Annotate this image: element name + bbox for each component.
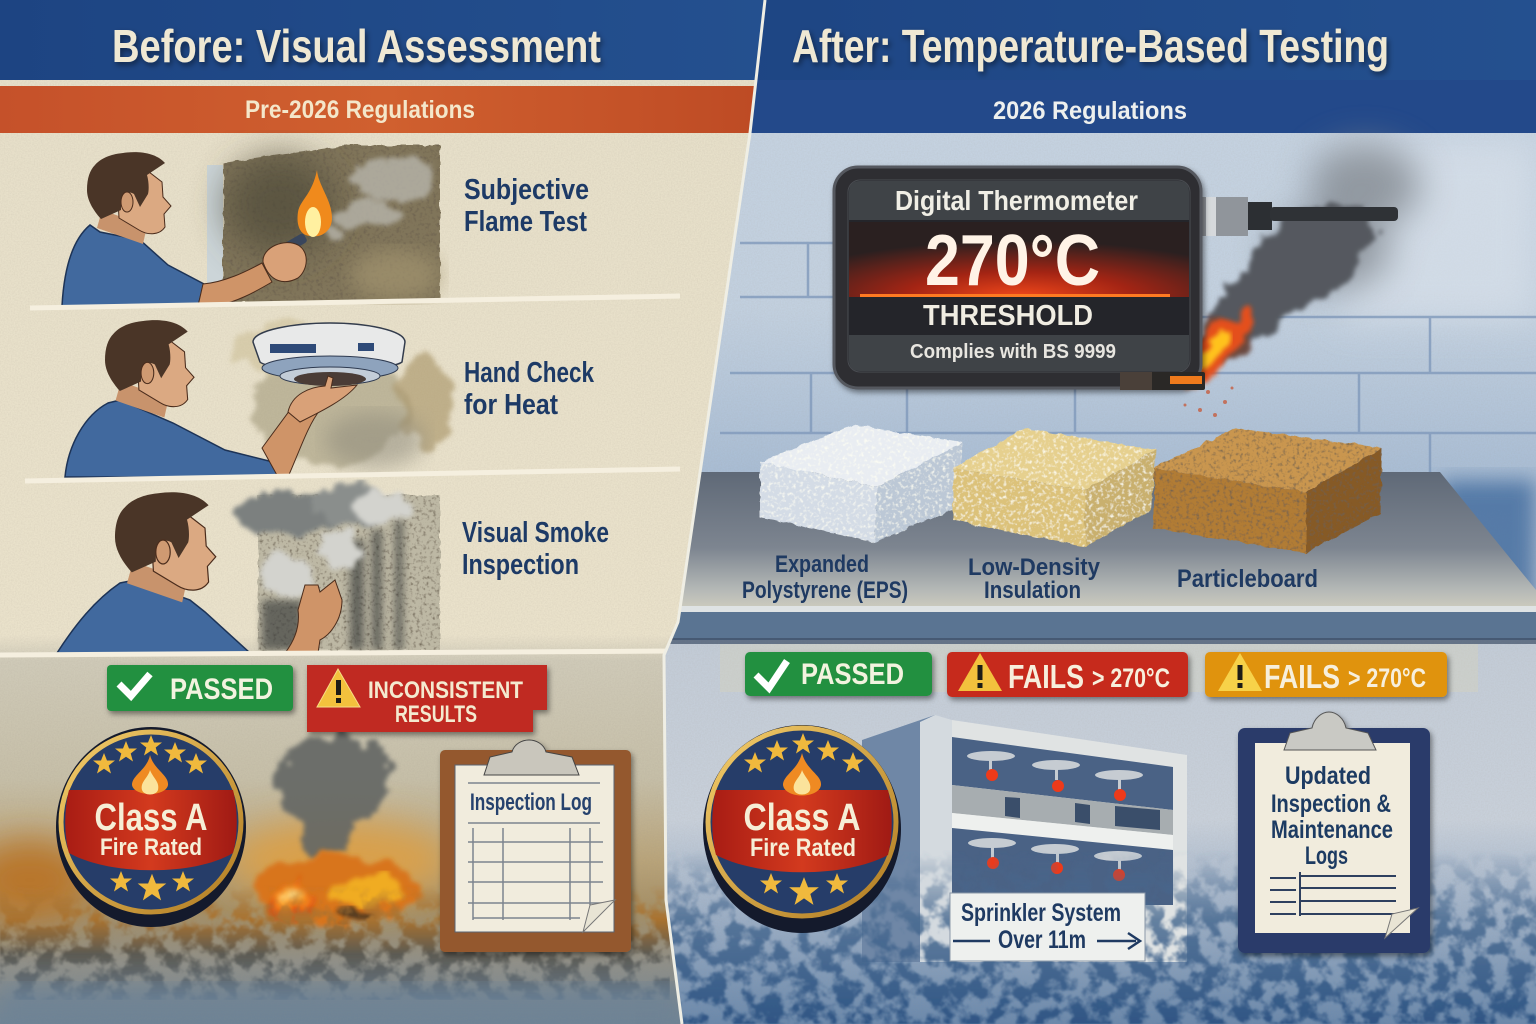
man: shirt and arm — [65, 320, 320, 477]
subheader: pre-2026: Pre-2026 Regulations — [245, 96, 475, 124]
smoke and fire from probe — [1170, 143, 1420, 417]
subheader: 2026: 2026 Regulations — [993, 97, 1187, 125]
badge: class A fire rated — [703, 725, 901, 933]
clipboard: updated logs: Updated — [1285, 762, 1371, 790]
text: flame test: Flame Test — [464, 206, 587, 238]
text: smoke inspection: Inspection — [462, 549, 579, 581]
thermometer — [834, 167, 1398, 390]
material: EPS: Expanded — [775, 551, 869, 578]
thermometer: Complies with BS 9999 — [910, 341, 1116, 363]
badge: class A fire rated: Class A — [94, 797, 208, 839]
material: EPS: Polystyrene (EPS) — [742, 577, 908, 604]
text: smoke inspection: Visual Smoke — [462, 517, 609, 549]
material: low-density insulation: Insulation — [984, 577, 1081, 604]
material: particleboard: Particleboard — [1177, 565, 1318, 593]
shelf — [660, 472, 1536, 644]
subheader: pre-2026 — [0, 86, 770, 133]
clipboard: updated logs: Inspection & — [1271, 790, 1391, 818]
badge: class A fire rated: Class A — [744, 797, 860, 839]
badge: fails amber: FAILS — [1264, 658, 1340, 695]
sign: sprinkler system — [950, 893, 1145, 961]
badge: class A fire rated: Fire Rated — [100, 834, 202, 861]
brick wall — [720, 243, 1536, 480]
probe — [1200, 197, 1398, 236]
hand — [288, 376, 357, 422]
badge: fails amber: > 270°C — [1348, 663, 1426, 693]
thermometer: 270°C — [925, 221, 1100, 301]
panel: after — [660, 0, 1536, 1024]
icon: flame — [298, 170, 332, 237]
man: shirt and arm — [62, 152, 308, 306]
clip — [1120, 372, 1205, 390]
sprinklers — [967, 751, 1143, 881]
badge: passed: PASSED — [801, 658, 904, 691]
material: EPS — [742, 425, 963, 604]
text: hand check: for Heat — [464, 389, 558, 421]
material: low-density insulation — [953, 428, 1156, 604]
badge: inconsistent results: RESULTS — [395, 701, 477, 728]
icon: smoke detector — [253, 323, 405, 386]
title: after: After: Temperature-Based Testing — [792, 20, 1389, 72]
row: flame test — [62, 145, 440, 306]
sign: sprinkler system: Over 11m — [998, 926, 1086, 954]
panel: before — [0, 0, 770, 1024]
badge: inconsistent results — [307, 665, 547, 732]
material: low-density insulation: Low-Density — [968, 554, 1101, 581]
clipboard: inspection log: Inspection Log — [470, 789, 592, 816]
header: after — [660, 0, 1536, 80]
clipboard: updated logs — [1238, 712, 1430, 953]
clipboard: inspection log — [440, 740, 631, 952]
subheader: 2026 — [660, 80, 1536, 133]
building with sprinklers — [862, 715, 1187, 962]
clipboard: updated logs: Maintenance — [1271, 816, 1393, 844]
row: hand check — [65, 320, 451, 477]
badge: fails red: FAILS — [1008, 658, 1084, 695]
badge: passed — [107, 665, 293, 711]
badge: fails red — [947, 652, 1188, 697]
fire and smoke scene — [0, 736, 680, 1024]
man: shirt and hand — [57, 492, 342, 653]
material: particleboard — [1154, 428, 1382, 593]
badge: fails amber — [1205, 652, 1447, 697]
text: hand check: Hand Check — [464, 357, 595, 389]
thermometer: THRESHOLD — [923, 300, 1093, 332]
ground blotches — [660, 850, 1536, 1024]
clipboard: updated logs: Logs — [1305, 842, 1348, 870]
badge: passed — [745, 652, 932, 696]
badge: passed: PASSED — [170, 673, 273, 706]
thermometer: Digital Thermometer — [895, 185, 1138, 216]
smoke — [318, 158, 434, 242]
badge: inconsistent results: INCONSISTENT — [368, 677, 523, 704]
badge: class A fire rated — [56, 727, 246, 927]
header: before — [0, 0, 770, 80]
sign: sprinkler system: Sprinkler System — [961, 899, 1121, 927]
row: smoke inspection — [57, 487, 440, 653]
badge: fails red: > 270°C — [1092, 663, 1170, 693]
badge: class A fire rated: Fire Rated — [750, 834, 856, 862]
text: flame test: Subjective — [464, 174, 589, 206]
title: before: Before: Visual Assessment — [112, 20, 601, 72]
